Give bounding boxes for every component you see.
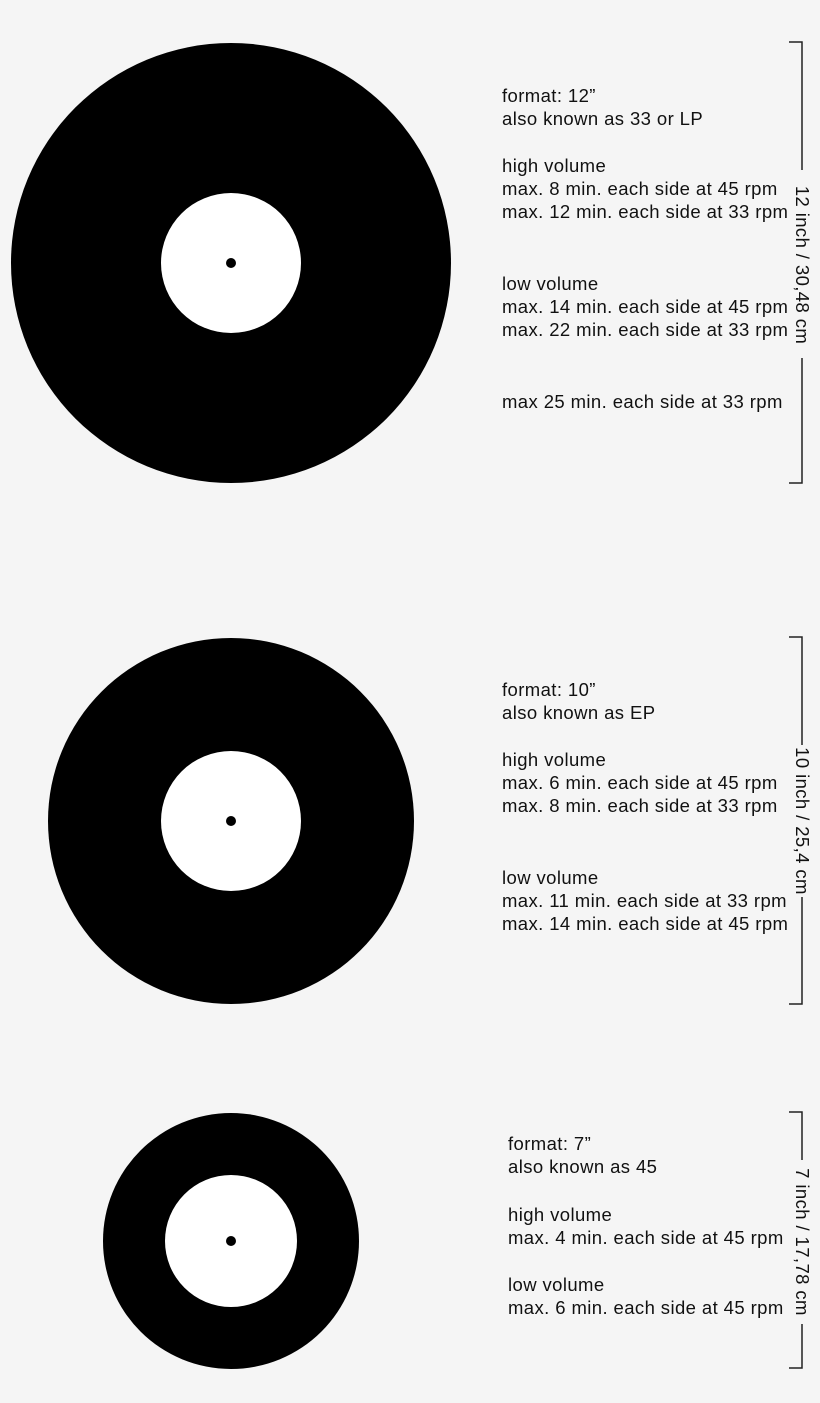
text block: 7 inch specs: max. 6 min. each side at 45 rpm — [508, 1297, 784, 1318]
dimension bracket: 10 inch: 10 inch / 25,4 cm — [792, 747, 813, 895]
text block: 12 inch specs: max 25 min. each side at 33 rpm — [502, 391, 783, 412]
text block: 12 inch specs: also known as 33 or LP — [502, 108, 703, 129]
text block: 10 inch specs: format: 10” — [502, 679, 596, 700]
dimension bracket: 10 inch — [789, 637, 813, 1004]
text block: 10 inch specs: also known as EP — [502, 702, 655, 723]
text block: 7 inch specs: format: 7” — [508, 1133, 591, 1154]
dimension bracket: 12 inch — [789, 42, 813, 483]
text block: 7 inch specs — [508, 1133, 784, 1318]
text block: 10 inch specs: high volume — [502, 749, 606, 770]
text block: 10 inch specs — [502, 679, 788, 934]
text block: 12 inch specs: max. 12 min. each side at 33 rpm — [502, 201, 788, 222]
text block: 10 inch specs: max. 6 min. each side at 45 rpm — [502, 772, 778, 793]
text block: 10 inch specs: max. 8 min. each side at 33 rpm — [502, 795, 778, 816]
dimension bracket: 12 inch: 12 inch / 30,48 cm — [792, 186, 813, 344]
text block: 10 inch specs: max. 11 min. each side at 33 rpm — [502, 890, 787, 911]
record: 12 inch — [11, 43, 451, 483]
text block: 12 inch specs: high volume — [502, 155, 606, 176]
text block: 12 inch specs: max. 22 min. each side at 33 rpm — [502, 319, 788, 340]
text block: 12 inch specs: max. 14 min. each side at 45 rpm — [502, 296, 788, 317]
record: 10 inch — [48, 638, 414, 1004]
text block: 7 inch specs: also known as 45 — [508, 1156, 657, 1177]
record: 7 inch — [103, 1113, 359, 1369]
text block: 12 inch specs — [502, 85, 788, 412]
text block: 7 inch specs: low volume — [508, 1274, 605, 1295]
text block: 12 inch specs: format: 12” — [502, 85, 596, 106]
text block: 7 inch specs: max. 4 min. each side at 45 rpm — [508, 1227, 784, 1248]
text block: 10 inch specs: max. 14 min. each side at 45 rpm — [502, 913, 788, 934]
dimension bracket: 7 inch — [789, 1112, 813, 1368]
text block: 7 inch specs: high volume — [508, 1204, 612, 1225]
dimension bracket: 7 inch: 7 inch / 17,78 cm — [792, 1168, 813, 1316]
text block: 12 inch specs: max. 8 min. each side at 45 rpm — [502, 178, 778, 199]
text block: 10 inch specs: low volume — [502, 867, 599, 888]
text block: 12 inch specs: low volume — [502, 273, 599, 294]
